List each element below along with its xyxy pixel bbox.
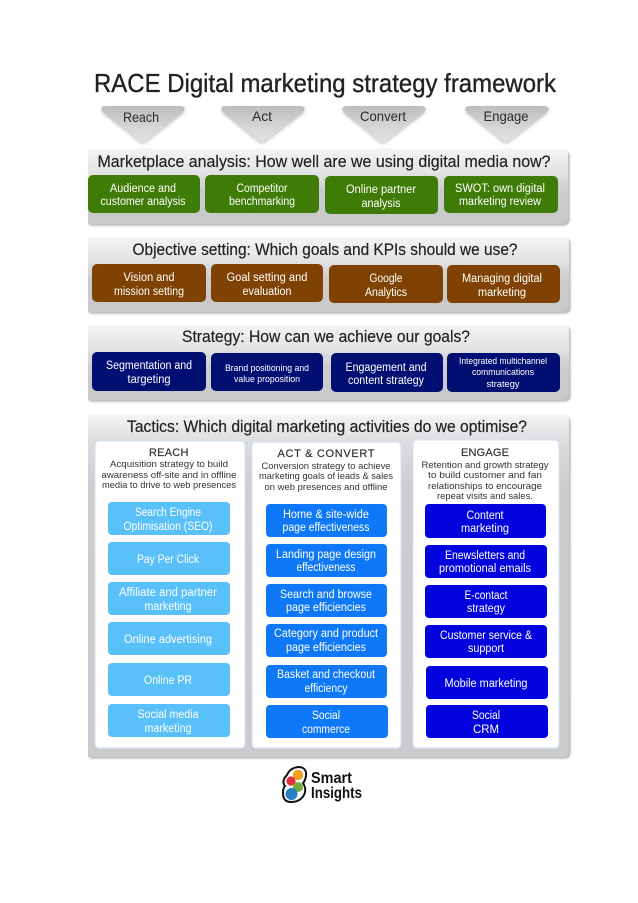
box: social commerce — [266, 705, 388, 738]
box: content marketing: marketing — [461, 523, 509, 535]
box: online advertising — [108, 622, 230, 655]
box: mobile marketing — [426, 666, 548, 699]
box: integrated multichannel — [447, 353, 560, 392]
box: landing page design: Landing page design — [276, 549, 376, 561]
box: Google Analytics: Google — [370, 273, 402, 285]
arrow: Act: Act — [252, 108, 272, 124]
arrow: Reach: Reach — [123, 109, 159, 125]
box: e-contact strategy: E-contact — [464, 590, 508, 602]
column description: reach: Acquisition strategy to build — [110, 459, 228, 470]
box: category and product: page efficiencies — [286, 642, 366, 654]
box: SWOT: marketing review — [459, 196, 542, 208]
icon: logo mark — [283, 767, 306, 802]
column description: engage: relationships to encourage — [428, 481, 542, 492]
column description: reach — [102, 459, 236, 491]
box: engagement and content strategy: content strategy — [348, 375, 424, 387]
box: basket and checkout: Basket and checkout — [277, 669, 376, 681]
column description: act and convert: Conversion strategy to achieve — [262, 461, 390, 472]
column description: engage: Retention and growth strategy — [422, 460, 549, 471]
box: segmentation and targeting: targeting — [128, 374, 170, 386]
box: basket and checkout: efficiency — [304, 683, 348, 695]
box: home and site-wide: Home & site-wide — [283, 509, 369, 521]
box: goal setting and evaluation: Goal setting and — [226, 272, 308, 284]
box: Google Analytics — [329, 265, 443, 303]
box: integrated multichannel: strategy — [486, 379, 520, 389]
box: Google Analytics: Analytics — [365, 287, 407, 299]
box: content marketing: Content — [466, 510, 504, 522]
box: customer service: support — [468, 643, 505, 655]
heading: strategy: Strategy: How can we achieve our goals? — [182, 327, 470, 346]
box: social commerce: Social — [312, 710, 340, 722]
box: engagement and content strategy — [331, 353, 443, 392]
box: online partner analysis — [325, 176, 438, 214]
box: managing digital marketing: Managing digital — [462, 273, 542, 285]
box: audience and customer analysis: Audience and — [110, 183, 176, 195]
box: landing page design — [266, 544, 387, 577]
box: goal setting and evaluation — [211, 264, 323, 302]
column: act and convert — [252, 442, 401, 748]
box: competitor benchmarking — [205, 175, 319, 213]
title: RACE Digital marketing strategy framework — [94, 68, 557, 98]
logo text: Smart — [311, 770, 353, 787]
box: search and browse: Search and browse — [280, 589, 372, 601]
arrow: Convert: Convert — [360, 108, 406, 124]
heading: tactics: Tactics: Which digital marketing activities do we optimise? — [127, 417, 527, 436]
arrow: Act — [221, 106, 305, 142]
panel: objective setting — [88, 237, 569, 312]
box: home and site-wide: page effectiveness — [282, 522, 370, 534]
panel: tactics — [88, 415, 569, 757]
box: online advertising: Online advertising — [124, 634, 212, 646]
arrow: Engage — [465, 106, 549, 142]
box: online PR — [108, 663, 230, 696]
column description: reach: media to drive to web presences — [102, 480, 236, 491]
box: online PR: Online PR — [144, 675, 192, 687]
box: SEO — [108, 502, 230, 535]
box: vision and mission setting — [92, 264, 206, 302]
box: social CRM — [426, 705, 548, 738]
box: segmentation and targeting — [92, 352, 206, 391]
column description: engage — [422, 460, 549, 502]
column heading: engage: ENGAGE — [461, 447, 509, 459]
arrow: Convert — [342, 106, 426, 142]
box: SWOT — [444, 176, 558, 213]
box: social media marketing: marketing — [144, 723, 192, 735]
arrow: Reach — [101, 106, 185, 142]
box: vision and mission setting: Vision and — [124, 272, 174, 284]
box: mobile marketing: Mobile marketing — [444, 678, 528, 690]
box: search and browse: page efficiencies — [286, 602, 366, 614]
heading: marketplace analysis: Marketplace analysis: How well are we using digital media now? — [98, 152, 550, 171]
box: SEO: Optimisation (SEO) — [124, 521, 213, 533]
box: content marketing — [425, 504, 546, 538]
box: competitor benchmarking: benchmarking — [229, 196, 295, 208]
box: brand positioning — [211, 353, 323, 391]
box: category and product: Category and product — [274, 628, 379, 640]
column description: act and convert — [259, 461, 393, 493]
box: customer service — [425, 625, 547, 658]
box: social media marketing — [108, 704, 230, 737]
column heading: act and convert: ACT & CONVERT — [278, 448, 375, 460]
logo text — [311, 770, 362, 802]
column description: act and convert: marketing goals of leads & sales — [259, 471, 393, 482]
box: affiliate and partner marketing: Affiliate and partner — [119, 587, 217, 599]
box: pay per click — [108, 542, 230, 575]
logo text: Insights — [311, 785, 362, 802]
column description: engage: repeat visits and sales. — [437, 491, 533, 502]
box: vision and mission setting: mission setting — [114, 286, 184, 298]
box: social CRM: CRM — [473, 724, 499, 736]
column description: act and convert: on web presences and offline — [264, 482, 388, 493]
column description: reach: awareness off-site and in offline — [102, 470, 236, 481]
box: brand positioning: value proposition — [234, 374, 300, 385]
column: engage — [413, 440, 559, 748]
box: affiliate and partner marketing: marketing — [144, 601, 192, 613]
arrow: Engage: Engage — [484, 108, 529, 124]
panel: marketplace analysis — [88, 149, 568, 224]
box: social media marketing: Social media — [138, 709, 199, 721]
column: reach — [95, 441, 245, 748]
box: customer service: Customer service & — [440, 630, 532, 642]
box: SEO: Search Engine — [135, 507, 201, 519]
box: integrated multichannel: communications — [472, 367, 534, 377]
panel: strategy — [88, 325, 569, 400]
box: search and browse — [266, 584, 387, 617]
box: landing page design: effectiveness — [296, 562, 356, 574]
box: e-contact strategy: strategy — [467, 603, 505, 615]
box: goal setting and evaluation: evaluation — [242, 286, 292, 298]
box: home and site-wide — [266, 504, 387, 537]
box: segmentation and targeting: Segmentation and — [106, 360, 192, 372]
box: category and product — [266, 624, 387, 657]
box: basket and checkout — [266, 665, 387, 698]
column description: engage: to build customer and fan — [428, 470, 542, 481]
logo: Smart Insights — [283, 767, 362, 802]
box: online partner analysis: analysis — [362, 198, 401, 210]
box: enewsletters: Enewsletters and — [445, 550, 525, 562]
box: managing digital marketing — [447, 265, 560, 303]
box: pay per click: Pay Per Click — [137, 554, 199, 566]
box: enewsletters — [425, 545, 547, 578]
box: affiliate and partner marketing — [108, 582, 230, 615]
box: managing digital marketing: marketing — [478, 287, 526, 299]
box: audience and customer analysis: customer analysis — [100, 196, 186, 208]
box: online partner analysis: Online partner — [346, 184, 416, 196]
box: social commerce: commerce — [302, 724, 350, 736]
box: engagement and content strategy: Engagement and — [346, 362, 426, 374]
box: enewsletters: promotional emails — [439, 563, 531, 575]
box: e-contact strategy — [425, 585, 547, 618]
box: audience and customer analysis — [88, 175, 200, 213]
box: SWOT: SWOT: own digital — [455, 183, 545, 195]
box: social CRM: Social — [472, 710, 500, 722]
box: brand positioning: Brand positioning and — [225, 363, 309, 374]
box: competitor benchmarking: Competitor — [236, 183, 288, 195]
heading: objective setting: Objective setting: Which goals and KPIs should we use? — [132, 240, 518, 259]
column heading: reach: REACH — [149, 447, 189, 459]
box: integrated multichannel: Integrated multichannel — [459, 356, 547, 366]
